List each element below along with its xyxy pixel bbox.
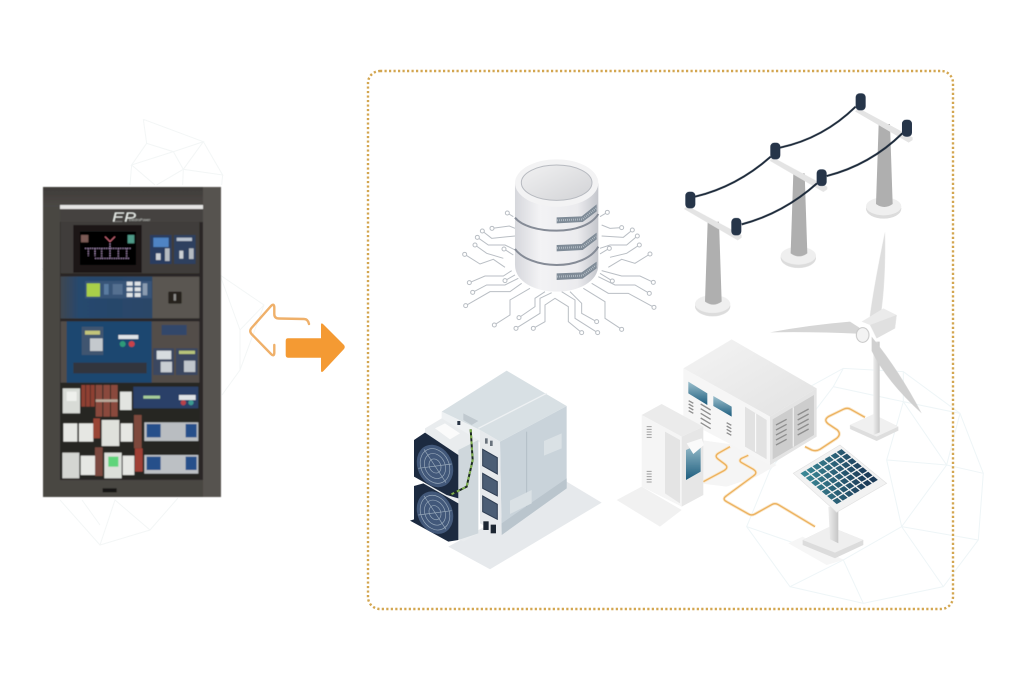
arrow: outline pointing left <box>250 305 309 355</box>
logo: ElectroPower <box>129 218 151 222</box>
arrow: solid pointing right <box>286 323 345 372</box>
fan upper <box>410 433 460 498</box>
light bar <box>60 205 203 209</box>
logo <box>60 209 203 226</box>
turbine base <box>850 414 898 441</box>
control cabinet <box>43 187 221 497</box>
insulators <box>685 93 912 235</box>
circuit traces <box>463 210 656 335</box>
turbine tower <box>873 342 880 435</box>
container box <box>683 339 817 465</box>
small cabinet <box>642 404 704 507</box>
power supply bay <box>480 430 502 535</box>
drive slots <box>557 204 597 280</box>
solar panel <box>793 445 887 558</box>
rack right face <box>500 406 567 535</box>
dotted frame <box>368 71 953 609</box>
top front ledge <box>442 412 480 443</box>
rack top <box>442 371 567 442</box>
rear pylon <box>855 108 913 219</box>
cylinder body <box>515 183 598 292</box>
middle panel with lime display <box>61 277 199 318</box>
fan lower <box>410 483 460 542</box>
icon: wind turbine <box>770 232 922 441</box>
miner body <box>425 418 478 542</box>
icon: database with circuit traces <box>463 159 656 335</box>
cylinder grooves <box>515 214 598 231</box>
turbine nacelle <box>862 308 897 338</box>
wires <box>695 107 902 224</box>
icon: power line pylons <box>684 93 913 316</box>
lower panel with relays <box>61 321 199 383</box>
floor shadow <box>448 482 602 569</box>
turbine blades <box>869 232 885 320</box>
logo: EP <box>112 210 136 226</box>
background mesh: behind cabinet <box>42 119 264 545</box>
cylinder top <box>515 159 598 207</box>
terminal and device rows <box>61 383 199 497</box>
icon: crypto miner unit <box>410 371 602 569</box>
background mesh: lower right globe <box>747 368 983 603</box>
front pylon <box>684 206 742 316</box>
cables <box>703 408 865 527</box>
top panel with touchscreen and relays <box>61 222 199 273</box>
ground shadows <box>617 487 682 527</box>
middle pylon <box>770 157 827 268</box>
green ground cable <box>450 429 473 495</box>
cabinet frame <box>43 187 221 497</box>
icon: energy storage and solar <box>617 339 887 565</box>
